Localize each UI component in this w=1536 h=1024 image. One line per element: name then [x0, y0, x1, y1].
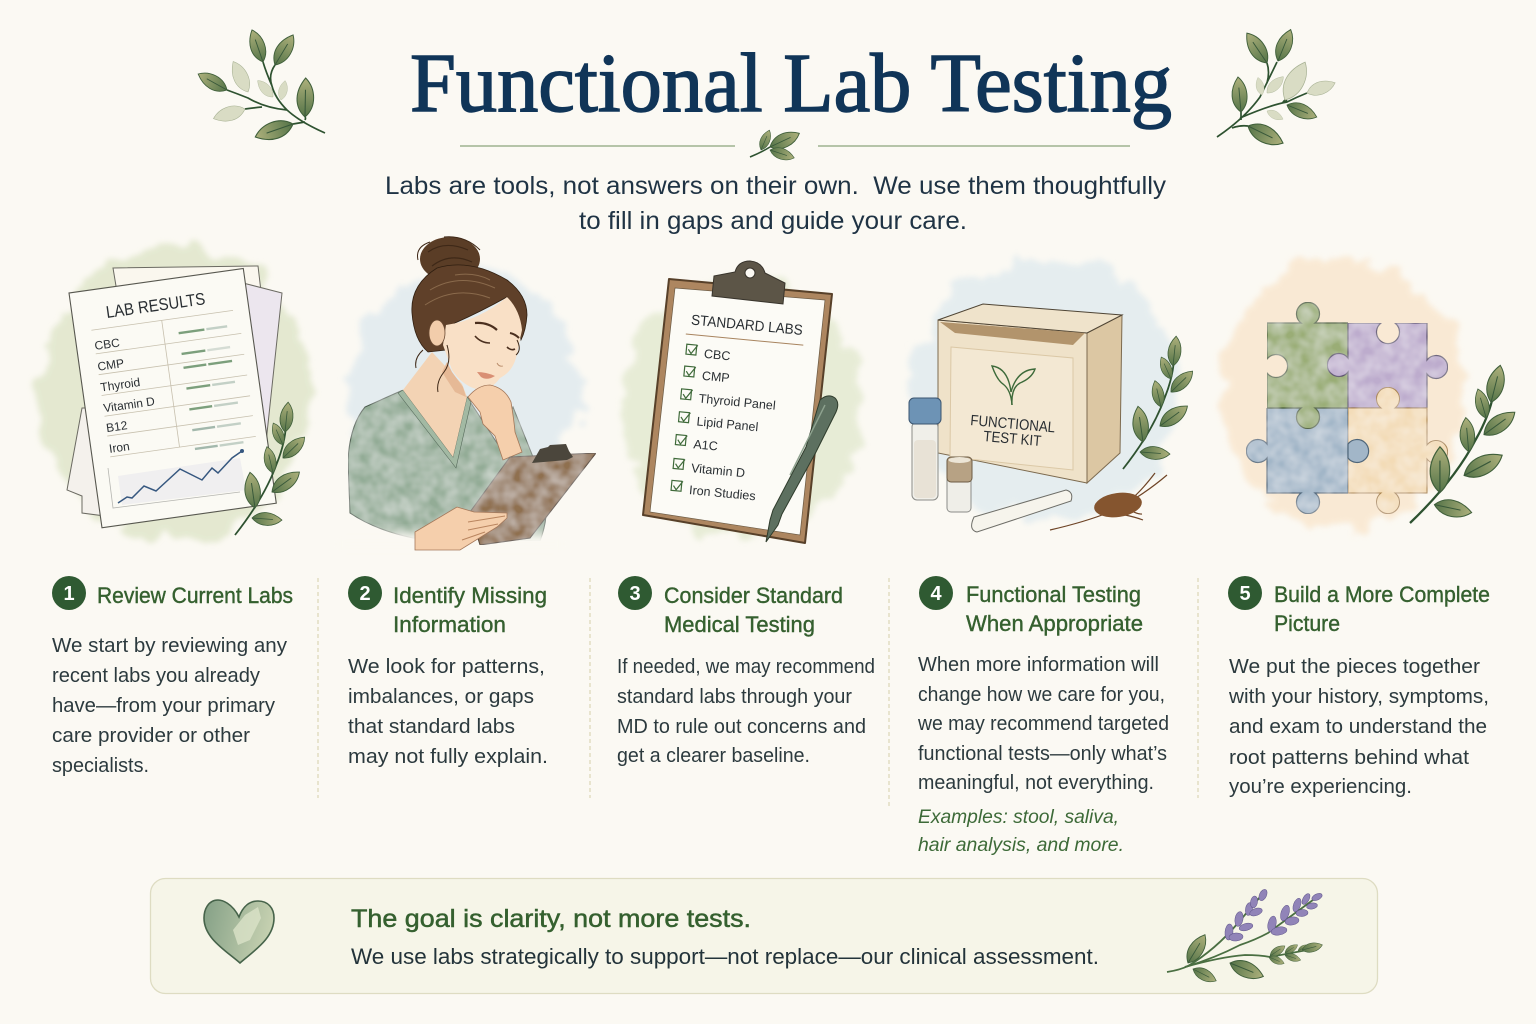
- heading 2: [393, 583, 547, 637]
- lab results sheet: CMP: [97, 356, 125, 374]
- hair highlights: [425, 274, 495, 305]
- face: [443, 297, 522, 390]
- number badge 4: 4: [930, 583, 942, 605]
- blue piece: [1246, 408, 1348, 514]
- callout heading: The goal is clarity, not more tests.: [351, 905, 751, 933]
- loose hair strands: [416, 340, 519, 392]
- green piece: [1267, 302, 1348, 429]
- neck shadow: [442, 362, 466, 397]
- heading 5: Build a More Complete: [1274, 582, 1490, 607]
- body 3: standard labs through your: [617, 685, 852, 708]
- heading 5: Picture: [1274, 611, 1340, 636]
- body 3: get a clearer baseline.: [617, 744, 810, 767]
- body 4: we may recommend targeted: [917, 712, 1169, 735]
- pen: [766, 396, 838, 542]
- step 1: [52, 576, 293, 777]
- body 4: change how we care for you,: [918, 683, 1165, 706]
- body 4: functional tests—only what’s: [918, 742, 1167, 765]
- neck and chest: [403, 352, 467, 457]
- body 2: that standard labs: [348, 715, 515, 738]
- lab results sheet: CBC: [94, 335, 121, 353]
- subtitle: [385, 172, 1167, 235]
- subtitle: Labs are tools, not answers on their own. We use them thoughtfully: [385, 172, 1167, 200]
- number badge 4: [919, 576, 953, 610]
- box: [938, 304, 1122, 483]
- examples note: Examples: stool, saliva,: [918, 806, 1119, 828]
- sprig: [1123, 335, 1197, 469]
- box logo: [992, 366, 1035, 405]
- step 5: [1228, 576, 1490, 798]
- number badge 1: [52, 576, 86, 610]
- number badge 3: [618, 576, 652, 610]
- hair: [412, 265, 527, 352]
- illustration: standard labs clipboard: CMP: [701, 369, 730, 385]
- body 2: may not fully explain.: [348, 745, 548, 768]
- bottom fade: [335, 533, 565, 555]
- lower hand: [415, 507, 507, 550]
- line chart: [108, 449, 246, 508]
- body 5: and exam to understand the: [1229, 715, 1487, 738]
- body 1: care provider or other: [52, 724, 250, 747]
- number badge 2: [348, 576, 382, 610]
- heading 4: When Appropriate: [966, 611, 1143, 636]
- illustration: standard labs clipboard: Iron Studies: [688, 483, 756, 503]
- small vial: [947, 457, 972, 512]
- body 5: you’re experiencing.: [1229, 775, 1412, 798]
- illustration: standard labs clipboard: CBC: [703, 347, 731, 363]
- body 4: When more information will: [918, 653, 1159, 676]
- number badge 3: 3: [629, 583, 641, 605]
- illustration: standard labs clipboard: A1C: [693, 437, 718, 453]
- illustration: standard labs clipboard: [619, 261, 863, 543]
- blue knob: [1348, 440, 1369, 462]
- swab tube: [972, 490, 1072, 532]
- facial features: [475, 323, 519, 379]
- illustration: woman reviewing clipboard: [335, 237, 596, 555]
- heading 4: [966, 582, 1143, 636]
- sweater collar: [398, 390, 471, 468]
- hair sample: [1050, 473, 1167, 530]
- body 2: We look for patterns,: [348, 655, 545, 678]
- illustration: standard labs clipboard: Thyroid Panel: [698, 392, 776, 413]
- heading 3: Consider Standard: [664, 583, 843, 608]
- sprig: [235, 401, 309, 535]
- lab results sheet: Iron: [108, 439, 131, 456]
- purple piece: [1327, 323, 1448, 408]
- body 5: [1228, 655, 1489, 798]
- heading 2: Identify Missing: [393, 583, 547, 608]
- heading 5: [1274, 582, 1490, 636]
- body 1: have—from your primary: [52, 694, 276, 717]
- heading 3: [664, 583, 843, 637]
- body 1: specialists.: [52, 754, 149, 777]
- body 4: [917, 653, 1169, 794]
- illustration: standard labs clipboard: STANDARD LABS: [690, 312, 803, 339]
- decorative sprig right of title: [1217, 27, 1337, 151]
- examples note: [918, 806, 1124, 856]
- illustration: lab results papers: [41, 245, 309, 541]
- body 1: [52, 634, 288, 777]
- box: TEST KIT: [983, 428, 1042, 450]
- vial with blue cap: [909, 398, 941, 500]
- clipboard frame: [643, 279, 832, 543]
- illustration: standard labs clipboard: Lipid Panel: [696, 414, 759, 434]
- icon: heart: [204, 900, 274, 963]
- clipboard clip: [532, 444, 573, 463]
- step 2: [348, 576, 548, 768]
- illustration: functional test kit: [909, 260, 1197, 532]
- heading 3: Medical Testing: [664, 612, 815, 637]
- metal clip: [712, 261, 785, 304]
- body 1: We start by reviewing any: [52, 634, 288, 657]
- box: FUNCTIONAL: [970, 412, 1056, 436]
- sprig: [1410, 355, 1527, 536]
- body 3: [617, 655, 875, 767]
- number badge 1: 1: [63, 583, 75, 605]
- lab results sheet: B12: [105, 418, 129, 435]
- raised hand: [468, 385, 522, 460]
- body 5: We put the pieces together: [1229, 655, 1480, 678]
- number badge 2: 2: [359, 583, 371, 605]
- heading 2: Information: [393, 612, 506, 637]
- lab results sheet: [69, 269, 276, 528]
- subtitle: to fill in gaps and guide your care.: [579, 207, 967, 235]
- body 5: with your history, symptoms,: [1228, 685, 1489, 708]
- body 2: imbalances, or gaps: [348, 685, 534, 708]
- body 5: root patterns behind what: [1229, 746, 1469, 769]
- column dividers: [318, 578, 1198, 806]
- title divider with sprig: [460, 127, 1130, 163]
- icon: lavender: [1167, 888, 1323, 986]
- number badge 5: [1228, 576, 1262, 610]
- body 2: [348, 655, 548, 768]
- illustration: puzzle pieces: [1221, 257, 1527, 536]
- decorative sprig left of title: [195, 28, 325, 145]
- number badge 5: 5: [1239, 583, 1251, 605]
- step 4: [917, 576, 1169, 856]
- lab results sheet: Thyroid: [99, 375, 141, 394]
- lab results sheet: LAB RESULTS: [105, 289, 206, 322]
- heading 1: Review Current Labs: [97, 583, 293, 608]
- sweater: [348, 390, 546, 541]
- bun: [418, 237, 480, 281]
- body 3: MD to rule out concerns and: [617, 715, 866, 738]
- clipboard: [470, 453, 596, 545]
- title: Functional Lab Testing: [410, 37, 1172, 130]
- body 4: meaningful, not everything.: [918, 771, 1154, 794]
- peach piece: [1348, 387, 1448, 514]
- body 1: recent labs you already: [52, 664, 261, 687]
- clipboard paper: [650, 288, 825, 535]
- lab results sheet: Vitamin D: [102, 394, 156, 415]
- step 3: [617, 576, 875, 767]
- ear: [429, 320, 445, 346]
- body 3: If needed, we may recommend: [617, 655, 875, 678]
- callout text: We use labs strategically to support—not replace—our clinical assessment.: [351, 944, 1099, 969]
- heading 4: Functional Testing: [966, 582, 1141, 607]
- callout panel: [150, 878, 1378, 994]
- illustration: standard labs clipboard: Vitamin D: [691, 461, 746, 480]
- examples note: hair analysis, and more.: [918, 834, 1124, 856]
